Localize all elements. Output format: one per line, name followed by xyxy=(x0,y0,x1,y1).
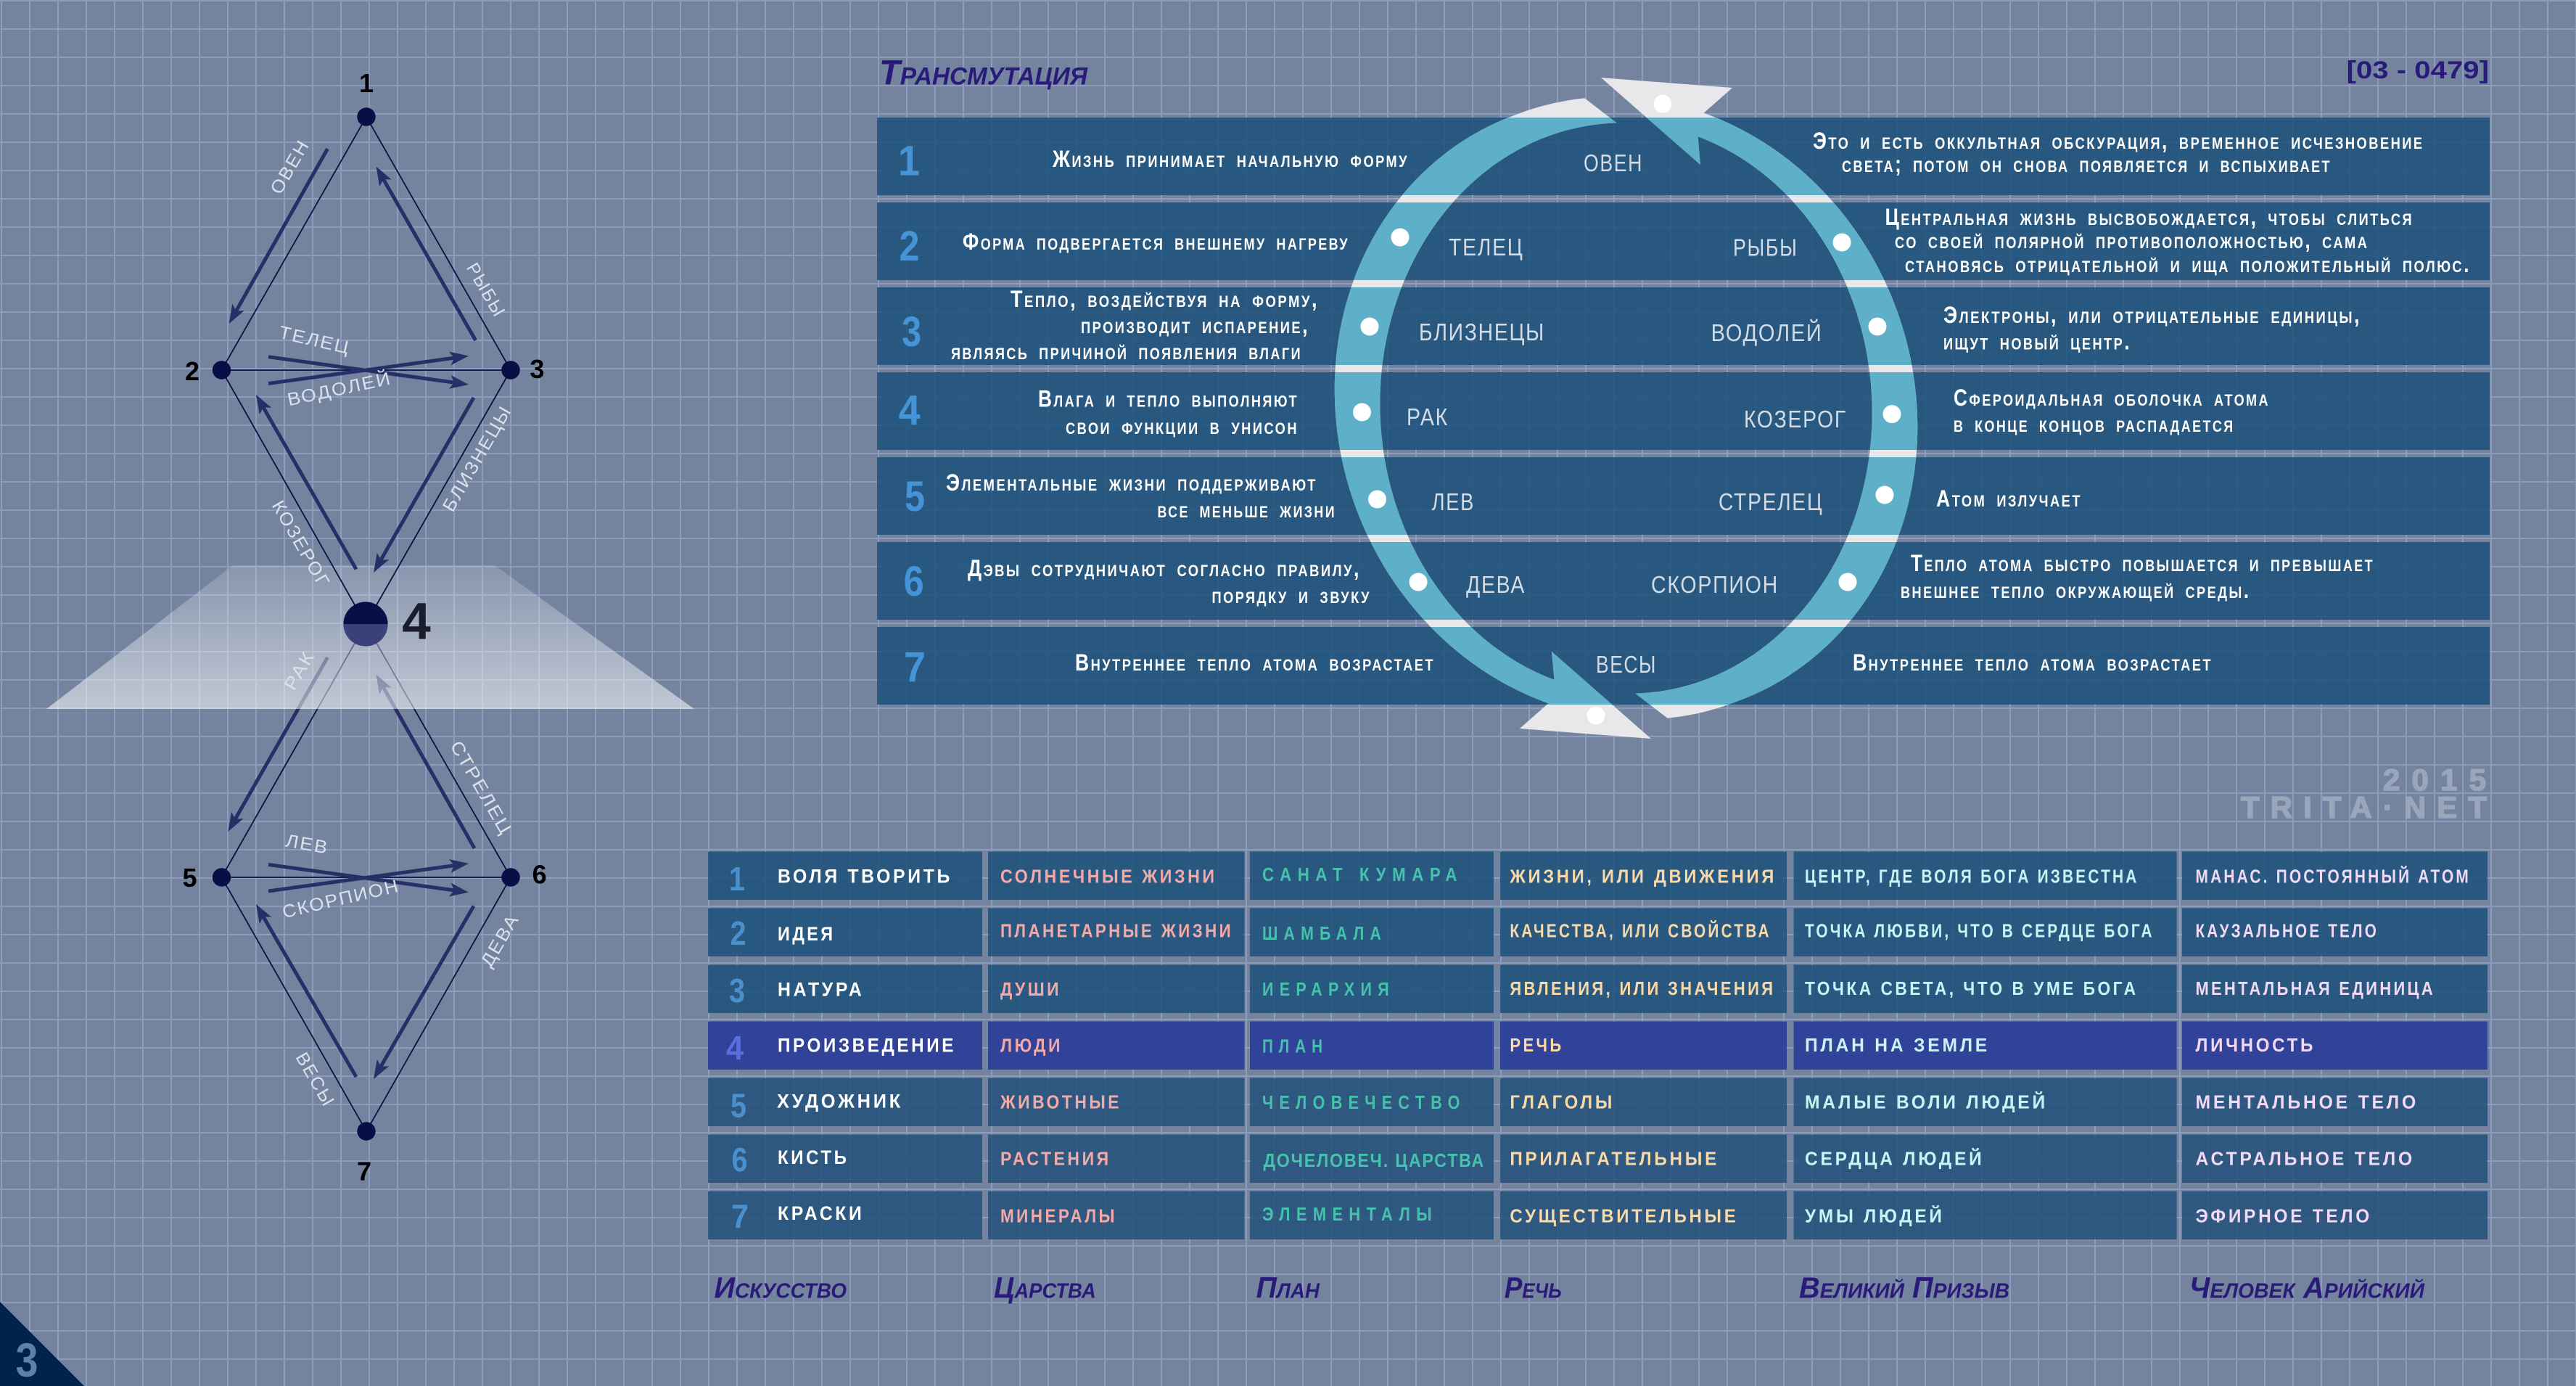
node numbers: 4 xyxy=(402,594,431,651)
rotated sign labels: РАК xyxy=(280,647,319,694)
zodiac labels inside ring: ВЕСЫ xyxy=(1596,651,1657,678)
column: art: КИСТЬ xyxy=(778,1147,849,1168)
corner page marker: 3 xyxy=(16,1333,38,1386)
column: plan: ДОЧЕЛОВЕЧ. ЦАРСТВА xyxy=(1264,1149,1485,1171)
rotated sign labels: КОЗЕРОГ xyxy=(268,497,334,591)
left column descriptions: Внутреннее тепло атома возрастает xyxy=(1075,649,1435,676)
node numbers: 5 xyxy=(182,863,197,893)
column: great invocation: ЦЕНТР, ГДЕ ВОЛЯ БОГА ИЗВЕСТНА xyxy=(1805,866,2139,887)
column: speech: РЕЧЬ xyxy=(1510,1034,1564,1056)
left column descriptions: Тепло, воздействуя на форму, xyxy=(1011,286,1319,312)
left column descriptions: производит испарение, xyxy=(1081,312,1309,338)
column: aryan man: МАНАС. ПОСТОЯННЫЙ АТОМ xyxy=(2195,866,2471,887)
reference code: [03 - 0479] xyxy=(2347,57,2489,84)
rotated sign labels: ВОДОЛЕЙ xyxy=(285,367,393,410)
right column descriptions xyxy=(1813,128,2471,676)
rotated sign labels: ЛЕВ xyxy=(284,831,330,858)
column: kingdoms xyxy=(1000,866,1233,1226)
row numbers: 7 xyxy=(904,644,926,691)
corner page marker xyxy=(0,1302,84,1386)
column: great invocation: УМЫ ЛЮДЕЙ xyxy=(1805,1205,1945,1226)
column: art xyxy=(777,866,956,1224)
column: great invocation: МАЛЫЕ ВОЛИ ЛЮДЕЙ xyxy=(1805,1091,2048,1112)
column: kingdoms: МИНЕРАЛЫ xyxy=(1000,1205,1117,1226)
node numbers: 1 xyxy=(359,68,374,98)
zodiac labels inside ring: ОВЕН xyxy=(1584,149,1643,176)
table row numbers: 7 xyxy=(731,1197,749,1235)
rotated sign labels: ДЕВА xyxy=(477,910,524,971)
table row numbers: 1 xyxy=(729,860,745,898)
left column descriptions: Элементальные жизни поддерживают xyxy=(946,469,1317,496)
reflective plane trapezoid xyxy=(46,565,694,709)
zodiac labels inside ring: СКОРПИОН xyxy=(1651,571,1779,598)
panel: transmutation rows xyxy=(877,118,2490,705)
zodiac labels inside ring: КОЗЕРОГ xyxy=(1744,406,1847,432)
lower diamond lines and arrows behind the plane xyxy=(222,624,511,1131)
rotated sign labels xyxy=(266,136,524,1111)
left column descriptions: Влага и тепло выполняют xyxy=(1038,386,1299,412)
node numbers: 6 xyxy=(532,860,547,890)
row numbers: 2 xyxy=(900,223,920,270)
column: art: ХУДОЖНИК xyxy=(777,1090,903,1112)
column: plan: ИЕРАРХИЯ xyxy=(1262,978,1395,1000)
table row numbers: 2 xyxy=(730,914,746,952)
column: great invocation: ПЛАН НА ЗЕМЛЕ xyxy=(1805,1034,1990,1056)
column: art: ПРОИЗВЕДЕНИЕ xyxy=(778,1035,956,1057)
zodiac labels inside ring: ВОДОЛЕЙ xyxy=(1711,319,1823,346)
row numbers: 4 xyxy=(899,387,921,434)
column: great invocation: ТОЧКА СВЕТА, ЧТО В УМЕ БОГА xyxy=(1805,977,2139,999)
right column descriptions: ищут новый центр. xyxy=(1943,329,2131,355)
column: kingdoms: ДУШИ xyxy=(1000,978,1061,1000)
left column descriptions: Форма подвергается внешнему нагреву xyxy=(963,229,1349,255)
panel: correspondences table cells xyxy=(708,852,2487,1239)
column: plan: ПЛАН xyxy=(1262,1036,1328,1057)
rotated sign labels: ВЕСЫ xyxy=(292,1049,339,1111)
column: aryan man: ЭФИРНОЕ ТЕЛО xyxy=(2195,1205,2372,1226)
table row numbers: 6 xyxy=(731,1141,747,1178)
right column descriptions: внешнее тепло окружающей среды. xyxy=(1901,577,2250,603)
zodiac labels inside ring: РЫБЫ xyxy=(1733,234,1798,261)
right column descriptions: Атом излучает xyxy=(1936,485,2082,512)
right column descriptions: Сфероидальная оболочка атома xyxy=(1954,385,2270,411)
table column headings: Искусство xyxy=(714,1271,847,1305)
rotated sign labels: СТРЕЛЕЦ xyxy=(446,737,516,839)
zodiac labels inside ring: ДЕВА xyxy=(1466,571,1526,598)
right column descriptions: становясь отрицательной и ища положительный полюс. xyxy=(1905,251,2471,277)
column: kingdoms: СОЛНЕЧНЫЕ ЖИЗНИ xyxy=(1000,866,1217,887)
column: aryan man: МЕНТАЛЬНОЕ ТЕЛО xyxy=(2195,1091,2419,1112)
column: kingdoms: ПЛАНЕТАРНЫЕ ЖИЗНИ xyxy=(1000,920,1233,942)
column: speech: ПРИЛАГАТЕЛЬНЫЕ xyxy=(1510,1148,1719,1170)
rotated sign labels: БЛИЗНЕЦЫ xyxy=(439,402,516,515)
column: art: НАТУРА xyxy=(778,978,865,1000)
column: aryan man xyxy=(2195,866,2471,1226)
column: kingdoms: РАСТЕНИЯ xyxy=(1000,1148,1111,1170)
rotated sign labels: ТЕЛЕЦ xyxy=(277,322,353,358)
zodiac labels inside ring: БЛИЗНЕЦЫ xyxy=(1419,319,1545,345)
left column descriptions: все меньше жизни xyxy=(1158,496,1336,522)
column: art: КРАСКИ xyxy=(778,1202,865,1224)
watermark xyxy=(2241,763,2487,824)
right column descriptions: со своей полярной противоположностью, сама xyxy=(1895,227,2369,253)
node numbers: 3 xyxy=(530,354,544,384)
circular arrows ring xyxy=(1335,78,1917,739)
column: art: ВОЛЯ ТВОРИТЬ xyxy=(778,866,952,887)
column: plan: ЧЕЛОВЕЧЕСТВО xyxy=(1262,1091,1466,1113)
table column headings: Человек Арийский xyxy=(2189,1271,2425,1305)
column: aryan man: МЕНТАЛЬНАЯ ЕДИНИЦА xyxy=(2195,977,2435,999)
watermark: 2015 xyxy=(2383,763,2486,797)
column: aryan man: КАУЗАЛЬНОЕ ТЕЛО xyxy=(2195,920,2379,942)
zodiac labels inside ring: СТРЕЛЕЦ xyxy=(1719,488,1823,515)
column: speech: КАЧЕСТВА, ИЛИ СВОЙСТВА xyxy=(1510,920,1771,942)
column: speech: ЯВЛЕНИЯ, ИЛИ ЗНАЧЕНИЯ xyxy=(1510,977,1775,999)
zodiac labels inside ring: ТЕЛЕЦ xyxy=(1449,234,1523,261)
right column descriptions: Тепло атома быстро повышается и превышает xyxy=(1911,550,2374,576)
column: plan xyxy=(1262,864,1485,1225)
column: kingdoms: ЖИВОТНЫЕ xyxy=(1000,1091,1122,1112)
watermark: TRITA·NET xyxy=(2241,790,2487,824)
right column descriptions: Внутреннее тепло атома возрастает xyxy=(1853,649,2213,676)
row numbers: 3 xyxy=(902,308,921,356)
row numbers: 6 xyxy=(904,558,924,605)
upper diamond lines and arrows xyxy=(222,117,511,624)
left column descriptions: Дэвы сотрудничают согласно правилу, xyxy=(968,555,1361,581)
table row numbers: 3 xyxy=(729,972,745,1009)
node numbers: 2 xyxy=(185,356,199,386)
column: plan: ШАМБАЛА xyxy=(1262,922,1387,944)
column: aryan man: АСТРАЛЬНОЕ ТЕЛО xyxy=(2195,1148,2415,1170)
node numbers: 7 xyxy=(357,1157,371,1186)
row numbers: 1 xyxy=(898,138,920,185)
rotated sign labels: РЫБЫ xyxy=(462,259,509,321)
left column descriptions: Жизнь принимает начальную форму xyxy=(1052,146,1409,172)
rotated sign labels: СКОРПИОН xyxy=(280,876,402,922)
row numbers xyxy=(898,138,926,691)
left column descriptions: являясь причиной появления влаги xyxy=(951,338,1302,364)
zodiac labels inside ring: РАК xyxy=(1407,403,1449,430)
rotated sign labels: ОВЕН xyxy=(266,136,314,198)
table column headings: План xyxy=(1256,1271,1320,1305)
right column descriptions: Электроны, или отрицательные единицы, xyxy=(1943,302,2361,328)
table column headings: Великий Призыв xyxy=(1799,1271,2009,1305)
zodiac labels inside ring: ЛЕВ xyxy=(1432,488,1475,515)
right column descriptions: в конце концов распадается xyxy=(1954,411,2235,437)
column: great invocation xyxy=(1805,866,2155,1226)
left column descriptions: порядку и звуку xyxy=(1211,582,1371,608)
column: speech xyxy=(1509,866,1777,1226)
right column descriptions: света; потом он снова появляется и вспыхивает xyxy=(1842,151,2332,177)
left column descriptions: свои функции в унисон xyxy=(1066,413,1299,439)
column: great invocation: СЕРДЦА ЛЮДЕЙ xyxy=(1805,1148,1985,1170)
column: great invocation: ТОЧКА ЛЮБВИ, ЧТО В СЕРДЦЕ БОГА xyxy=(1805,920,2155,942)
nodes xyxy=(213,107,520,1141)
title: Трансмутация xyxy=(879,54,1088,93)
column: aryan man: ЛИЧНОСТЬ xyxy=(2195,1034,2316,1056)
zodiac labels inside ring xyxy=(1407,149,1847,678)
row numbers: 5 xyxy=(905,473,925,520)
diagram: seven-point double diamond xyxy=(46,68,694,1186)
table column headings: Речь xyxy=(1505,1271,1562,1305)
table row numbers xyxy=(726,860,749,1235)
column: plan: САНАТ КУМАРА xyxy=(1262,864,1463,885)
column: kingdoms: ЛЮДИ xyxy=(1000,1035,1063,1057)
column: plan: ЭЛЕМЕНТАЛЫ xyxy=(1262,1203,1438,1225)
table row numbers: 4 xyxy=(726,1029,744,1067)
table column headings: Царства xyxy=(994,1271,1096,1305)
left column descriptions xyxy=(946,146,1435,676)
node numbers xyxy=(182,68,547,1186)
column: speech: ЖИЗНИ, ИЛИ ДВИЖЕНИЯ xyxy=(1509,866,1777,887)
column: speech: ГЛАГОЛЫ xyxy=(1510,1091,1615,1112)
column: speech: СУЩЕСТВИТЕЛЬНЫЕ xyxy=(1510,1205,1738,1226)
column: art: ИДЕЯ xyxy=(778,923,836,945)
table row numbers: 5 xyxy=(731,1087,746,1125)
right column descriptions: Это и есть оккультная обскурация, временное исчезновение xyxy=(1813,128,2424,154)
right column descriptions: Центральная жизнь высвобождается, чтобы слиться xyxy=(1885,204,2414,230)
table column headings xyxy=(714,1271,2425,1305)
